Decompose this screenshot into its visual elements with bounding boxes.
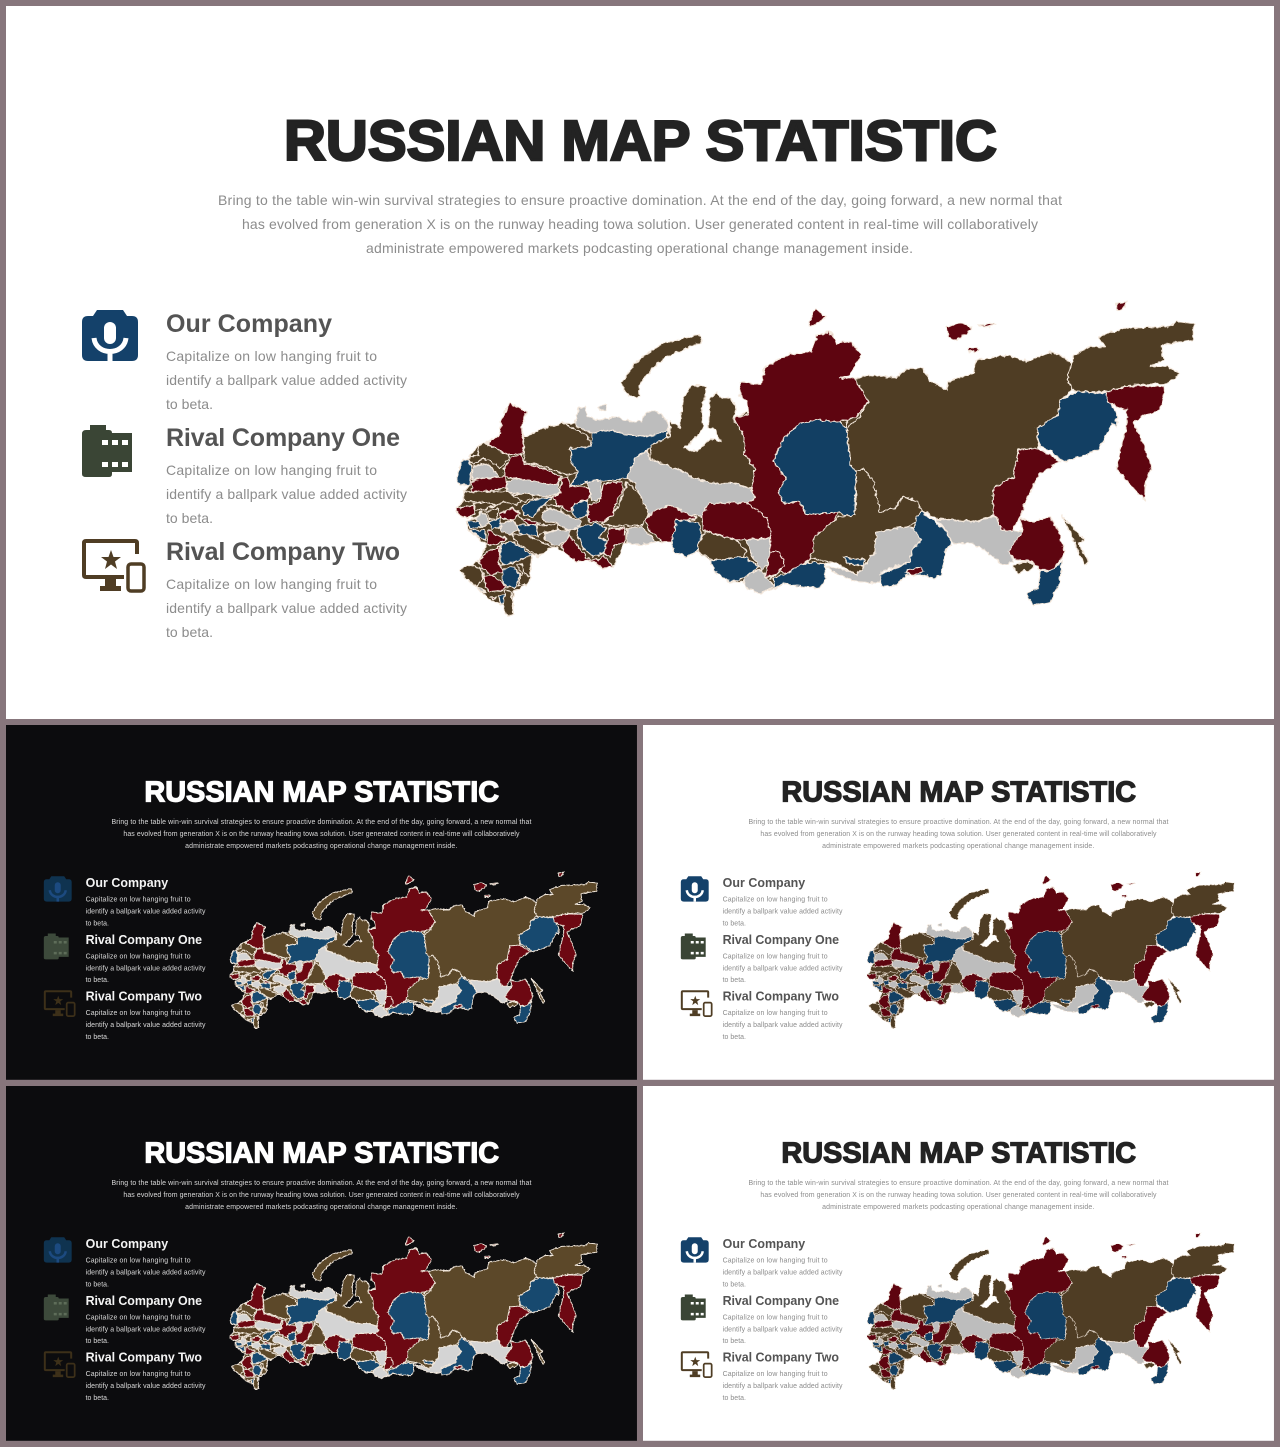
legend: rival company one: Rival Company One: [723, 933, 839, 947]
legend: rival company two: identify a ballpark value added activity: [723, 1022, 843, 1029]
legend: our company: to beta.: [166, 396, 213, 412]
panel: white slide, row one: [643, 725, 1274, 1080]
legend: rival company two: identify a ballpark value added activity: [166, 600, 407, 616]
legend: our company: Our Company: [86, 876, 168, 890]
map of Russia: [867, 1233, 1234, 1389]
panel: large white slide: [6, 6, 1274, 719]
intro paragraph: has evolved from generation X is on the runway heading towa solution. User generated content in real-time will collaboratively: [760, 1192, 1157, 1199]
intro paragraph: Bring to the table win-win survival strategies to ensure proactive domination. At the end of the day, going forward, a new normal that: [111, 819, 532, 826]
legend: rival company one: Capitalize on low hanging fruit to: [723, 953, 828, 960]
legend: rival company two: to beta.: [86, 1395, 109, 1402]
intro paragraph: [111, 1180, 532, 1211]
legend: our company: identify a ballpark value added activity: [723, 1270, 843, 1277]
legend: rival company two: to beta.: [86, 1034, 109, 1041]
legend: rival company two: [84, 538, 407, 640]
icon: monitor and phone: [45, 1352, 75, 1377]
icon: film roll: [681, 1294, 706, 1320]
legend: rival company one: [82, 424, 407, 526]
title: RUSSIAN MAP STATISTIC: [284, 109, 997, 173]
legend: our company: to beta.: [86, 1282, 109, 1289]
legend: rival company one: to beta.: [86, 1338, 109, 1345]
legend: rival company two: identify a ballpark value added activity: [723, 1383, 843, 1390]
icon: microphone: [82, 310, 138, 361]
icon: monitor and phone: [84, 541, 144, 591]
intro paragraph: [748, 1180, 1169, 1211]
title: RUSSIAN MAP STATISTIC: [144, 777, 499, 809]
legend: rival company one: identify a ballpark value added activity: [86, 1326, 206, 1333]
legend: our company: [82, 310, 407, 412]
legend: rival company one: Rival Company One: [723, 1294, 839, 1308]
legend: rival company one: identify a ballpark value added activity: [166, 486, 407, 502]
legend: rival company one: to beta.: [166, 510, 213, 526]
intro paragraph: Bring to the table win-win survival strategies to ensure proactive domination. At the end of the day, going forward, a new normal that: [218, 192, 1062, 208]
legend: rival company one: [44, 933, 206, 984]
legend: rival company one: to beta.: [723, 1338, 746, 1345]
legend: our company: Our Company: [723, 1237, 805, 1251]
panel: dark slide, row two: [6, 1086, 637, 1441]
legend: rival company two: [45, 990, 206, 1041]
legend: our company: Capitalize on low hanging fruit to: [86, 1258, 191, 1265]
legend: rival company one: Capitalize on low hanging fruit to: [166, 462, 377, 478]
intro paragraph: has evolved from generation X is on the runway heading towa solution. User generated content in real-time will collaboratively: [123, 831, 520, 838]
icon: film roll: [82, 425, 132, 477]
title: RUSSIAN MAP STATISTIC: [781, 1138, 1136, 1170]
icon: film roll: [44, 933, 69, 959]
legend: rival company two: Rival Company Two: [723, 1351, 839, 1365]
legend: rival company two: to beta.: [723, 1034, 746, 1041]
legend: our company: identify a ballpark value added activity: [166, 372, 407, 388]
legend: rival company one: identify a ballpark value added activity: [723, 965, 843, 972]
intro paragraph: [748, 819, 1169, 850]
icon: microphone: [44, 876, 72, 902]
legend: our company: [681, 1237, 843, 1289]
icon: monitor and phone: [45, 991, 75, 1016]
legend: rival company one: to beta.: [723, 977, 746, 984]
map of Russia: [867, 872, 1234, 1028]
legend: rival company two: Capitalize on low hanging fruit to: [166, 576, 377, 592]
legend: our company: to beta.: [723, 1282, 746, 1289]
legend: rival company one: [681, 1294, 843, 1345]
icon: monitor and phone: [682, 991, 712, 1016]
legend: rival company two: identify a ballpark value added activity: [86, 1022, 206, 1029]
legend: rival company two: Capitalize on low hanging fruit to: [723, 1010, 828, 1017]
legend: rival company one: [44, 1294, 206, 1345]
icon: film roll: [681, 933, 706, 959]
legend: our company: [44, 1237, 206, 1289]
legend: rival company two: identify a ballpark value added activity: [86, 1383, 206, 1390]
legend: our company: Our Company: [723, 876, 805, 890]
legend: rival company two: Capitalize on low hanging fruit to: [86, 1010, 191, 1017]
legend: rival company two: [682, 1351, 843, 1402]
legend: our company: identify a ballpark value added activity: [86, 1270, 206, 1277]
icon: film roll: [44, 1294, 69, 1320]
icon: microphone: [44, 1237, 72, 1263]
legend: rival company two: Rival Company Two: [86, 990, 202, 1004]
legend: rival company two: [682, 990, 843, 1041]
legend: rival company two: Rival Company Two: [166, 538, 400, 566]
legend: our company: to beta.: [723, 921, 746, 928]
legend: rival company one: Capitalize on low hanging fruit to: [86, 1314, 191, 1321]
legend: rival company one: Rival Company One: [86, 1294, 202, 1308]
legend: rival company two: Rival Company Two: [86, 1351, 202, 1365]
intro paragraph: has evolved from generation X is on the runway heading towa solution. User generated content in real-time will collaboratively: [123, 1192, 520, 1199]
legend: rival company two: Capitalize on low hanging fruit to: [723, 1371, 828, 1378]
panel: dark slide, row one: [6, 725, 637, 1080]
intro paragraph: [111, 819, 532, 850]
legend: rival company two: Capitalize on low hanging fruit to: [86, 1371, 191, 1378]
legend: our company: Capitalize on low hanging fruit to: [86, 897, 191, 904]
legend: rival company two: Rival Company Two: [723, 990, 839, 1004]
legend: rival company one: identify a ballpark value added activity: [86, 965, 206, 972]
panel: white slide, row two: [643, 1086, 1274, 1441]
icon: monitor and phone: [682, 1352, 712, 1377]
legend: our company: Our Company: [86, 1237, 168, 1251]
intro paragraph: administrate empowered markets podcasting operational change management inside.: [185, 843, 457, 850]
legend: rival company one: Capitalize on low hanging fruit to: [723, 1314, 828, 1321]
legend: rival company one: Rival Company One: [86, 933, 202, 947]
legend: rival company one: Rival Company One: [166, 424, 400, 452]
map of Russia: [230, 872, 597, 1028]
legend: our company: Capitalize on low hanging fruit to: [166, 348, 377, 364]
intro paragraph: [218, 192, 1062, 256]
intro paragraph: has evolved from generation X is on the runway heading towa solution. User generated content in real-time will collaboratively: [760, 831, 1157, 838]
legend: our company: [681, 876, 843, 928]
legend: our company: Capitalize on low hanging fruit to: [723, 1258, 828, 1265]
title: RUSSIAN MAP STATISTIC: [781, 777, 1136, 809]
legend: our company: to beta.: [86, 921, 109, 928]
intro paragraph: Bring to the table win-win survival strategies to ensure proactive domination. At the end of the day, going forward, a new normal that: [111, 1180, 532, 1187]
icon: microphone: [681, 1237, 709, 1263]
intro paragraph: Bring to the table win-win survival strategies to ensure proactive domination. At the end of the day, going forward, a new normal that: [748, 1180, 1169, 1187]
legend: rival company one: identify a ballpark value added activity: [723, 1326, 843, 1333]
intro paragraph: has evolved from generation X is on the runway heading towa solution. User generated content in real-time will collaboratively: [242, 216, 1038, 232]
intro paragraph: administrate empowered markets podcasting operational change management inside.: [366, 240, 913, 256]
legend: our company: [44, 876, 206, 928]
legend: rival company one: Capitalize on low hanging fruit to: [86, 953, 191, 960]
icon: microphone: [681, 876, 709, 902]
legend: our company: identify a ballpark value added activity: [86, 909, 206, 916]
legend: our company: Capitalize on low hanging fruit to: [723, 897, 828, 904]
legend: rival company one: [681, 933, 843, 984]
intro paragraph: administrate empowered markets podcasting operational change management inside.: [822, 1204, 1094, 1211]
map of Russia: [457, 302, 1193, 615]
legend: our company: Our Company: [166, 310, 332, 338]
legend: our company: identify a ballpark value added activity: [723, 909, 843, 916]
legend: rival company one: to beta.: [86, 977, 109, 984]
intro paragraph: Bring to the table win-win survival strategies to ensure proactive domination. At the end of the day, going forward, a new normal that: [748, 819, 1169, 826]
legend: rival company two: [45, 1351, 206, 1402]
legend: rival company two: to beta.: [166, 624, 213, 640]
intro paragraph: administrate empowered markets podcasting operational change management inside.: [185, 1204, 457, 1211]
legend: rival company two: to beta.: [723, 1395, 746, 1402]
intro paragraph: administrate empowered markets podcasting operational change management inside.: [822, 843, 1094, 850]
map of Russia: [230, 1233, 597, 1389]
title: RUSSIAN MAP STATISTIC: [144, 1138, 499, 1170]
